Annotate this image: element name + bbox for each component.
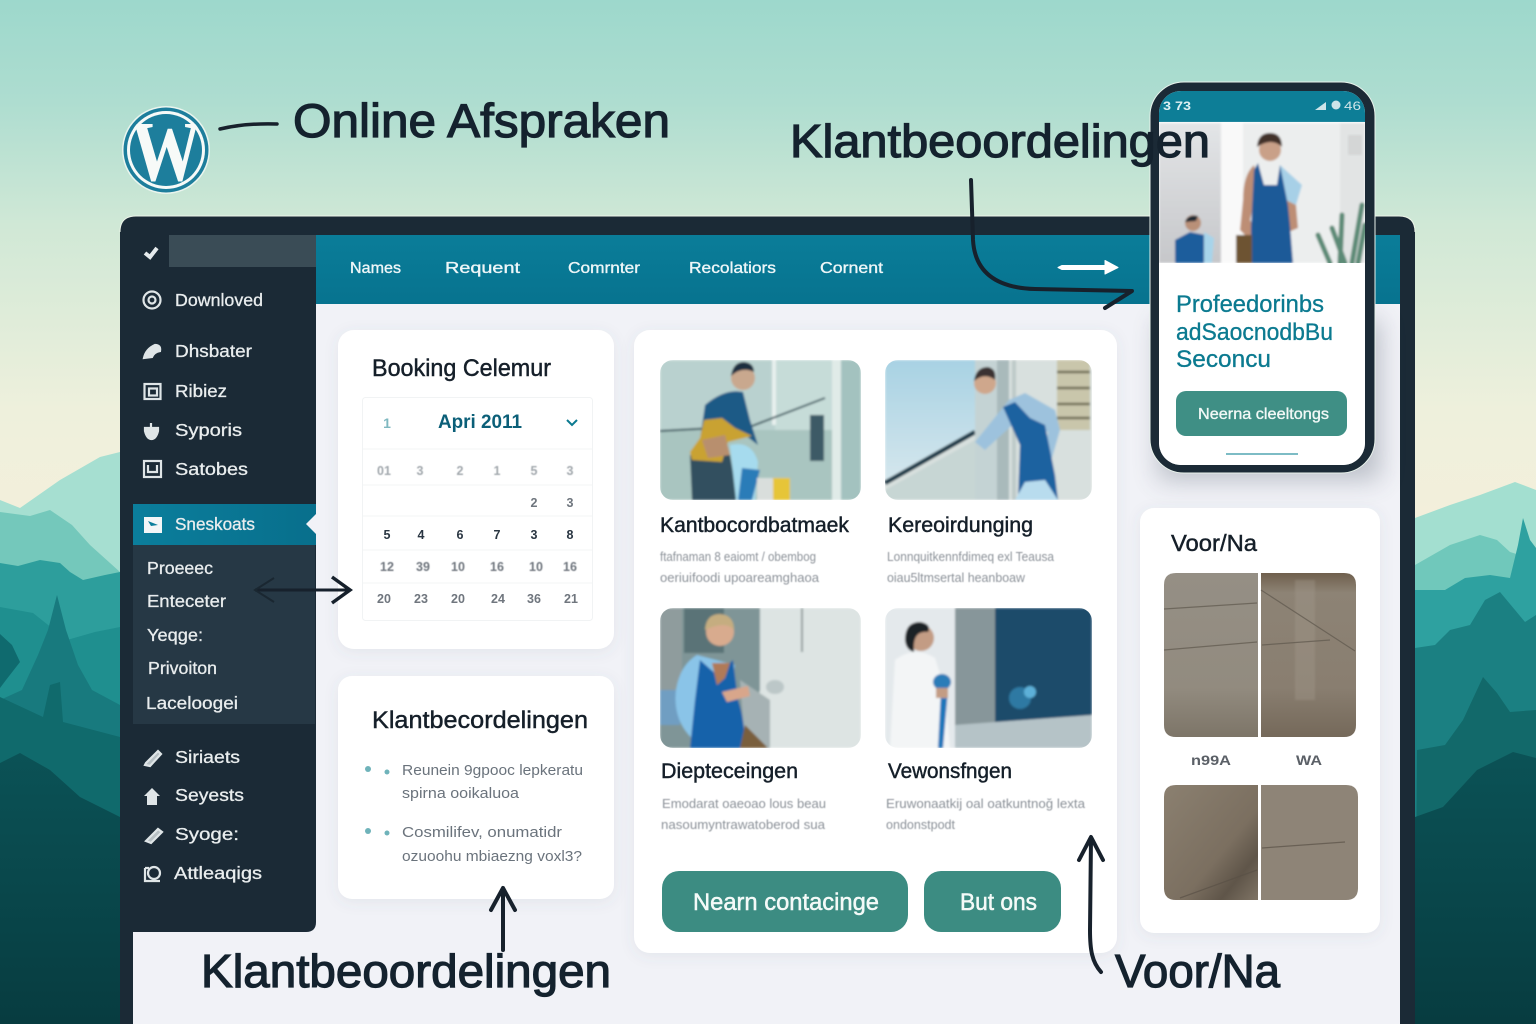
calendar widget: 24 [491, 592, 505, 606]
panel: services [634, 330, 1117, 953]
service titles: Diepteceingen [661, 760, 798, 783]
review text: Reunein 9gpooc lepkeratu [402, 762, 583, 779]
calendar widget: 12 [380, 560, 394, 574]
calendar widget: 01 [377, 464, 391, 478]
arrow: up to services panel [1079, 837, 1103, 972]
top navigation bar: Requent [445, 260, 521, 277]
arrow: up to reviews panel [491, 888, 515, 950]
calendar widget: 21 [564, 592, 578, 606]
calendar widget [362, 398, 592, 620]
service titles: Vewonsfngen [888, 760, 1012, 783]
icon: top check [145, 248, 157, 257]
phone status bar: 46 [1344, 99, 1361, 113]
top navigation bar: Comrnter [568, 260, 641, 277]
service titles [660, 514, 1033, 783]
submenu background [133, 545, 315, 724]
panel: voor/na: Voor/Na [1171, 530, 1257, 556]
button: But ons: But ons [960, 889, 1037, 916]
calendar widget: 39 [416, 560, 430, 574]
panel: booking calendar: Booking Celemur [372, 355, 551, 382]
calendar widget: 16 [490, 560, 504, 574]
phone heading: Seconcu [1176, 346, 1271, 373]
top navigation bar: Recolatiors [689, 260, 776, 277]
calendar widget: 10 [451, 560, 465, 574]
calendar widget: 20 [451, 592, 465, 606]
phone status bar: 3 73 [1163, 99, 1191, 113]
photo: man with steam cleaner [885, 608, 1092, 748]
panel: voor/na [1140, 508, 1380, 933]
service descriptions: nasoumyntrawatoberod sua [661, 818, 825, 832]
panel: klantbeoordelingen reviews [338, 676, 614, 899]
top navigation bar: Names [350, 260, 401, 277]
button: Nearn contacinge: Nearn contacinge [693, 889, 879, 916]
phone mockup [1150, 82, 1375, 473]
sidebar labels [146, 290, 263, 883]
sidebar labels: Attleaqigs [174, 863, 262, 883]
sidebar labels: Dhsbater [175, 341, 252, 361]
calendar widget: 36 [527, 592, 541, 606]
photo: cleaner with bucket [660, 360, 861, 500]
sidebar labels: Enteceter [147, 591, 226, 611]
sidebar labels: Seyests [175, 785, 244, 805]
review text: ozuoohu mbiaezng voxl3? [402, 848, 582, 865]
calendar widget: 2 [531, 496, 538, 510]
label: before: n99A [1191, 753, 1231, 768]
before/after pair 2 [1164, 743, 1358, 900]
sidebar labels: Satobes [175, 459, 248, 479]
phone heading [1176, 291, 1333, 373]
label: after: WA [1296, 753, 1322, 768]
sidebar labels: Laceloogei [146, 693, 238, 713]
icon: WordPress logo: W [131, 103, 201, 199]
review text: Cosmilifev, onumatidr [402, 824, 562, 841]
photo: woman at door [660, 608, 861, 748]
sidebar labels: Syoge: [175, 824, 239, 844]
panel: booking calendar [338, 330, 614, 649]
sidebar labels: Siriaets [175, 747, 240, 767]
service titles: Kantbocordbatmaek [660, 514, 849, 537]
service descriptions: Lonnquitkennfdimeq exl Teausa [887, 550, 1054, 564]
photo: cleaning glass rail [885, 360, 1092, 500]
menu icons [144, 292, 162, 881]
arrow: sidebar to calendar [255, 577, 350, 603]
icon: white double arrow [1058, 260, 1118, 274]
service descriptions: oeriuifoodi upoareamghaoa [660, 571, 819, 585]
arrow: curved to navigation [971, 180, 1132, 308]
sidebar labels: Yeqge: [147, 625, 203, 645]
service descriptions: Eruwonaatkij oal oatkuntnoğ lexta [886, 797, 1085, 811]
top navigation bar [316, 235, 1400, 304]
calendar widget: 3 [567, 464, 574, 478]
arrow: logo to heading [220, 124, 277, 129]
calendar widget: 16 [563, 560, 577, 574]
phone status bar [1159, 91, 1365, 122]
sidebar labels: Downloved [175, 290, 263, 310]
before/after pair 1 [1164, 573, 1356, 737]
dashboard frame [120, 216, 1415, 1024]
calendar widget: Apri 2011 [438, 412, 522, 433]
heading: Online Afspraken: Online Afspraken [293, 94, 670, 147]
calendar widget: 3 [567, 496, 574, 510]
background: left mountains [0, 452, 120, 1024]
service descriptions: oiau5ltmsertal heanboaw [887, 571, 1026, 585]
service descriptions: ftafnaman 8 eaiomt / obembog [660, 550, 816, 564]
heading: Voor/Na bottom: Voor/Na [1115, 945, 1280, 997]
phone button [1176, 391, 1347, 436]
sidebar labels: Proeeec [147, 558, 213, 578]
background: right mountains [1415, 482, 1536, 1024]
calendar widget: 5 [531, 464, 538, 478]
phone photo: cleaner [1159, 123, 1365, 263]
calendar widget: 1 [494, 464, 501, 478]
sidebar labels: Syporis [175, 420, 242, 440]
heading: Klantbeoordelingen bottom: Klantbeoordelingen [201, 945, 611, 997]
calendar widget: 1 [383, 415, 391, 431]
review text [402, 762, 583, 865]
top navigation bar: Cornent [820, 260, 884, 277]
button: But ons [924, 871, 1061, 932]
review bullets [365, 766, 390, 836]
calendar widget: 2 [457, 464, 464, 478]
calendar widget: 3 [417, 464, 424, 478]
calendar widget: 6 [457, 528, 464, 542]
heading: Klantbeoordelingen top: Klantbeoordelingen [790, 115, 1210, 167]
calendar widget: 4 [418, 528, 425, 542]
service descriptions [660, 550, 1085, 832]
active item [133, 504, 316, 545]
calendar widget: 3 [531, 528, 538, 542]
calendar widget: 20 [377, 592, 391, 606]
calendar widget: 10 [529, 560, 543, 574]
review text: spirna ooikaluoa [402, 785, 520, 802]
calendar widget: 23 [414, 592, 428, 606]
panel: klantbeoordelingen reviews: Klantbecordelingen [372, 707, 588, 734]
calendar widget: 8 [567, 528, 574, 542]
sidebar labels: Ribiez [175, 381, 227, 401]
phone heading: Profeedorinbs [1176, 291, 1324, 318]
service descriptions: Emodarat oaeoao lous beau [662, 797, 826, 811]
service descriptions: ondonstpodt [886, 818, 956, 832]
phone button: Neerna cleeltongs [1198, 406, 1329, 423]
sidebar labels: Privoiton [148, 658, 217, 678]
calendar widget: 5 [384, 528, 391, 542]
calendar widget: 7 [494, 528, 501, 542]
active item: Sneskoats [175, 514, 255, 534]
phone heading: adSaocnodbBu [1176, 319, 1333, 346]
button: Nearn contacinge [662, 871, 908, 932]
sidebar [133, 235, 316, 932]
service titles: Kereoirdunging [888, 514, 1033, 537]
